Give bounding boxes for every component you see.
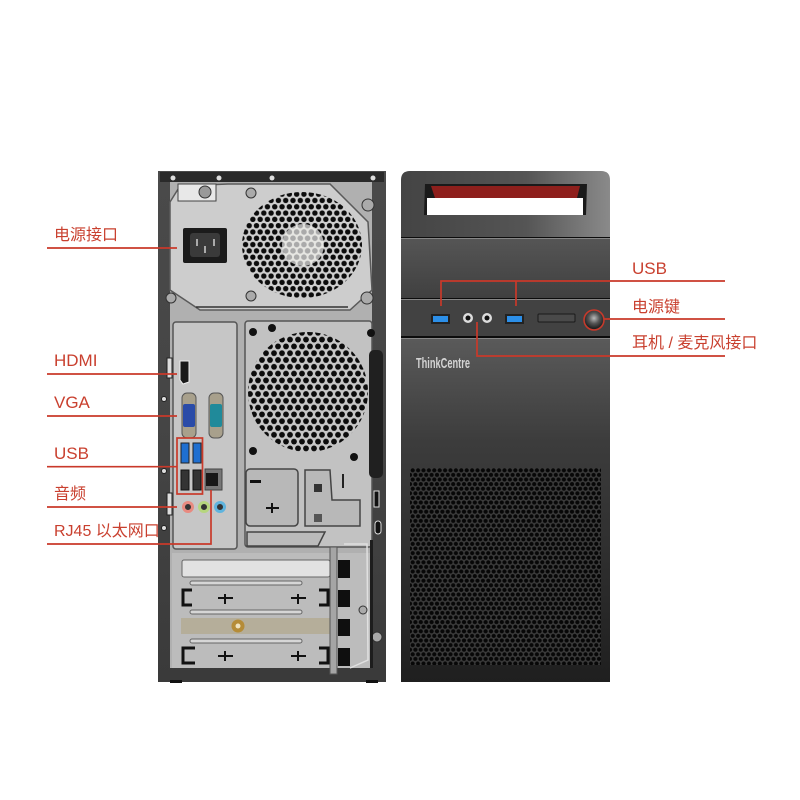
back view of tower	[158, 171, 386, 683]
front top section	[401, 171, 610, 238]
right panel	[245, 321, 372, 547]
label: audio	[47, 485, 177, 507]
right side details	[374, 491, 381, 534]
slot cover 1	[183, 590, 328, 605]
audio jack	[463, 313, 473, 323]
USB 2.0 ports	[181, 470, 201, 490]
red handle	[431, 186, 580, 198]
label: USB front	[441, 259, 725, 306]
label: HDMI: HDMI	[54, 351, 97, 370]
RJ45 port	[205, 469, 222, 490]
chassis frame	[158, 171, 386, 682]
label: audio: 音频	[54, 485, 86, 503]
top black bar with screws	[160, 172, 384, 182]
knockout panel right	[305, 470, 360, 526]
label: power button	[604, 298, 725, 319]
label: RJ45: RJ45 以太网口	[54, 522, 160, 540]
label: HDMI	[47, 351, 177, 374]
power supply fan grille	[240, 190, 364, 300]
gold slot plate	[181, 618, 330, 634]
label: headphone and microphone	[477, 322, 757, 356]
power socket	[183, 228, 227, 263]
power supply plate	[170, 184, 372, 310]
black slot ends	[338, 560, 350, 666]
handle recess	[424, 184, 587, 215]
microphone jack	[482, 313, 492, 323]
right inner dark strip	[370, 540, 373, 668]
slot vents	[190, 581, 302, 643]
lower angled slot	[247, 532, 325, 546]
front USB right	[505, 314, 524, 324]
expansion slot area	[172, 553, 370, 668]
slot cover 2	[183, 648, 328, 663]
seams	[401, 237, 610, 338]
USB 3.0 ports	[181, 443, 201, 463]
audio jacks	[184, 502, 224, 512]
handle opening	[427, 198, 583, 215]
knockout panel left	[246, 469, 298, 526]
rear I/O plate	[173, 322, 237, 549]
antenna connector	[232, 620, 244, 632]
psu bottom edge	[196, 306, 348, 308]
case fan grille	[246, 330, 370, 454]
retention latch outline	[344, 544, 368, 668]
fan hub highlight	[282, 224, 324, 266]
label: USB front: USB	[632, 259, 667, 278]
feet	[170, 680, 378, 683]
serial port	[209, 393, 223, 438]
label: power socket	[47, 226, 177, 248]
label: power socket: 电源接口	[54, 226, 118, 244]
label: VGA: VGA	[54, 393, 91, 412]
power button	[584, 310, 604, 330]
front USB left	[431, 314, 450, 324]
label: power button: 电源键	[632, 298, 680, 316]
latch tab	[178, 184, 216, 201]
inner metal body	[170, 182, 372, 668]
mounting holes	[249, 324, 375, 461]
label: RJ45	[47, 490, 211, 544]
front middle section	[401, 239, 610, 298]
lower body	[401, 339, 610, 682]
label: USB rear: USB	[54, 444, 89, 463]
right dark slot	[369, 350, 383, 478]
port band	[401, 300, 610, 337]
retention bar	[330, 547, 337, 674]
front view of tower	[401, 171, 610, 682]
blank slot bracket	[182, 560, 330, 577]
left side tabs	[162, 358, 172, 530]
label: headphone and microphone: 耳机 / 麦克风接口	[632, 334, 757, 352]
label: USB rear	[47, 438, 202, 494]
VGA port	[182, 393, 196, 438]
psu screws	[166, 188, 374, 304]
front grille	[410, 468, 601, 665]
HDMI port	[180, 361, 189, 384]
lower right screw	[359, 606, 382, 642]
card slot	[538, 314, 575, 322]
label: VGA	[47, 393, 177, 416]
ThinkCentre logo: ThinkCentre	[416, 355, 470, 372]
